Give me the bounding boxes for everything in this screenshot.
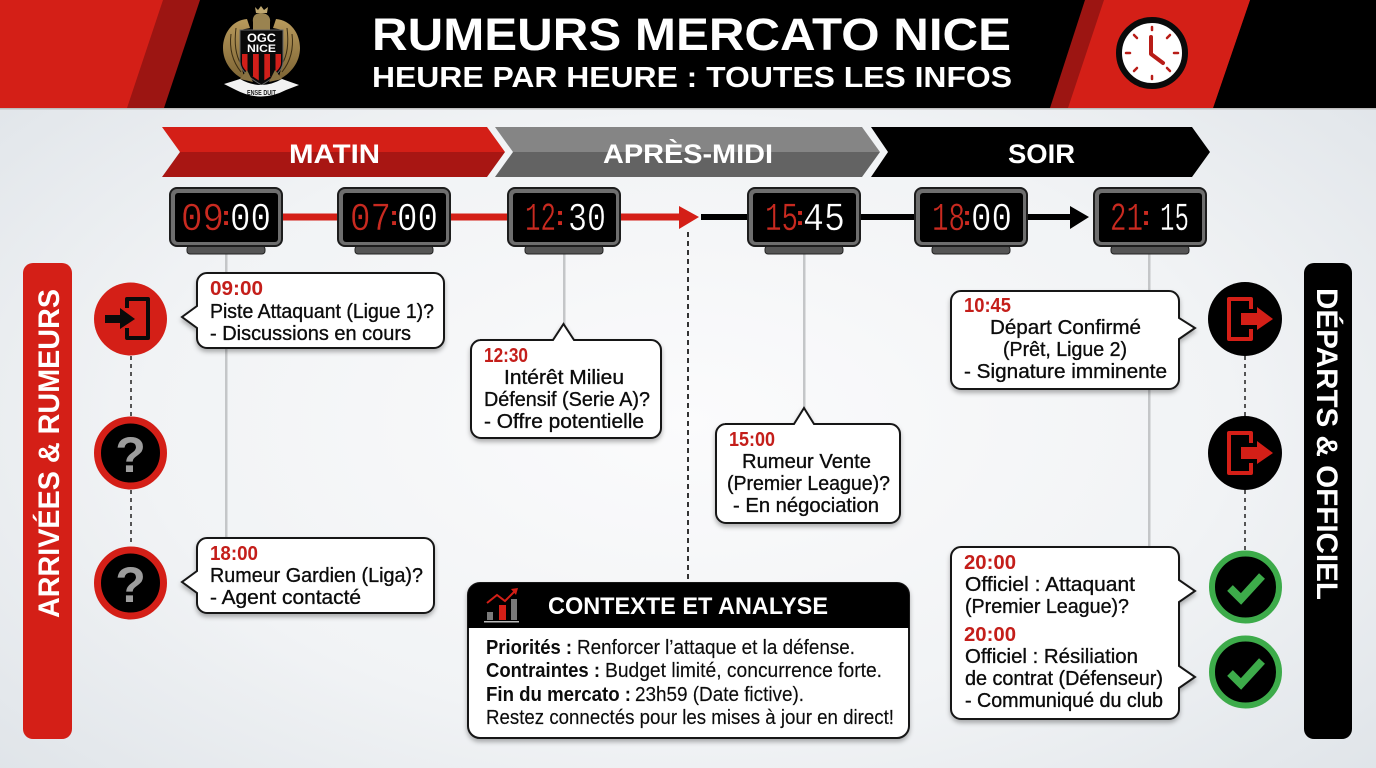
callout: 20:00 officiel [951,547,1195,719]
panel: Arrivées et rumeurs: ARRIVÉES & RUMEURS [32,289,66,618]
callout: 12:30: 12:30 [484,345,528,367]
arrow: black timeline [701,206,1089,229]
panel: contexte et analyse [468,583,909,738]
callout: 20:00 officiel: - Communiqué du club [965,689,1163,712]
callout: 18:00: Rumeur Gardien (Liga)? [210,564,423,587]
callout: 15:00: Rumeur Vente [742,450,871,473]
panel: contexte et analyse: Priorités : [486,636,572,659]
icon: OGC Nice crest [223,6,300,97]
clock 15:45: 15 [765,198,798,243]
band: Après-midi [495,127,880,177]
clock 12:30: : [555,200,565,231]
dashed connector to context panel [687,232,689,582]
callout: 12:30: Défensif (Serie A)? [484,388,650,411]
callout: 20:00 officiel: (Premier League)? [965,595,1129,618]
dashed links between right icons [1244,356,1246,550]
callout: 15:00: (Premier League)? [727,472,890,495]
icon: check 2 [1212,638,1279,706]
clock 18:00 [915,188,1027,254]
clock 15:45: 45 [803,198,845,243]
panel: Départs et officiel [1304,263,1352,739]
clock 12:30 [508,188,620,254]
clock 07:00: 00 [397,198,438,243]
clock 07:00: 07 [350,198,391,243]
clock 15:45 [748,188,860,254]
icon: growth chart [484,588,519,622]
clock 09:00: 09 [181,198,224,243]
clock 21:15: : [1141,200,1151,231]
callout: 15:00 [716,408,900,523]
title [372,9,1012,94]
clock 12:30: 12 [525,198,556,243]
callout: 10:45: Départ Confirmé [990,316,1141,339]
callout: 09:00: 09:00 [210,278,263,300]
panel: contexte et analyse: Restez connectés pour les mises à jour en direct! [486,706,894,729]
callout: 15:00: 15:00 [729,429,775,451]
icon: question 2: ? [115,557,146,613]
band: Après-midi: APRÈS-MIDI [603,138,773,169]
callout: 20:00 officiel: Officiel : Résiliation [965,645,1138,668]
clock 12:30: 30 [568,198,606,243]
icon: check 1 [1212,554,1279,620]
arrow: red timeline [283,206,699,229]
callout: 10:45 [951,291,1195,389]
callout: 09:00: - Discussions en cours [210,322,411,345]
callout: 12:30: - Offre potentielle [484,410,644,433]
icon: question 2 [98,550,164,616]
title: RUMEURS MERCATO NICE [372,9,1011,60]
clock 21:15: 15 [1160,198,1189,243]
clock 18:00: : [962,200,972,231]
header banner [0,0,1376,110]
panel: Départs et officiel: DÉPARTS & OFFICIEL [1310,288,1344,600]
callout: 18:00: 18:00 [210,543,258,565]
clock 09:00: : [221,200,231,231]
callout: 20:00 officiel: 20:00 [964,552,1016,574]
callout: 20:00 officiel: 20:00 [964,624,1016,646]
callout: 09:00 [182,273,444,348]
dashed links between left icons [130,356,132,546]
clock 21:15 [1094,188,1206,254]
icon: OGC Nice crest: OGC [247,31,276,45]
panel: contexte et analyse: 23h59 (Date fictive). [635,683,804,706]
band: Soir: SOIR [1008,139,1075,169]
panel: contexte et analyse: Budget limité, concurrence forte. [605,659,882,682]
panel: Arrivées et rumeurs [23,263,72,739]
clock 18:00: 18 [932,198,965,243]
clock 18:00: 00 [971,198,1012,243]
clock 07:00 [338,188,450,254]
icon: question 1: ? [115,427,146,483]
clock 15:45: : [795,200,805,231]
band: Soir [871,127,1210,177]
callout: 10:45: (Prêt, Ligue 2) [1003,338,1127,361]
icon: OGC Nice crest: ENSE DUIT [247,90,277,97]
clock 09:00 [170,188,282,254]
callout: 20:00 officiel: de contrat (Défenseur) [965,667,1163,690]
callout: 18:00 [182,538,434,613]
callout: 18:00: - Agent contacté [210,586,361,609]
callout: 20:00 officiel: Officiel : Attaquant [965,573,1135,596]
icon: OGC Nice crest: NICE [247,43,276,55]
band: Matin: MATIN [289,139,380,169]
callout: 15:00: - En négociation [733,494,879,517]
icon: question 1 [98,420,164,486]
callout: 12:30: Intérêt Milieu [504,366,624,389]
panel: contexte et analyse: CONTEXTE ET ANALYSE [548,593,828,620]
clock 07:00: : [389,200,399,231]
panel: contexte et analyse: Renforcer l’attaque et la défense. [577,636,855,659]
callout: 10:45: - Signature imminente [964,360,1167,383]
title: HEURE PAR HEURE : TOUTES LES INFOS [372,62,1012,94]
icon: clock [1119,20,1185,86]
callout: 12:30 [471,324,661,438]
band: Matin [162,127,505,177]
clock 21:15: 21 [1110,198,1143,243]
icon: arrival [94,282,167,356]
callout: 10:45: 10:45 [964,295,1011,317]
icon: departure 2 [1208,416,1282,490]
panel: contexte et analyse: Fin du mercato : [486,683,631,706]
panel: contexte et analyse: Contraintes : [486,659,600,682]
icon: departure 1 [1208,282,1282,356]
callout: 09:00: Piste Attaquant (Ligue 1)? [210,300,434,323]
clock 09:00: 00 [230,198,271,243]
connector lines from clocks to bubbles [225,250,1150,548]
